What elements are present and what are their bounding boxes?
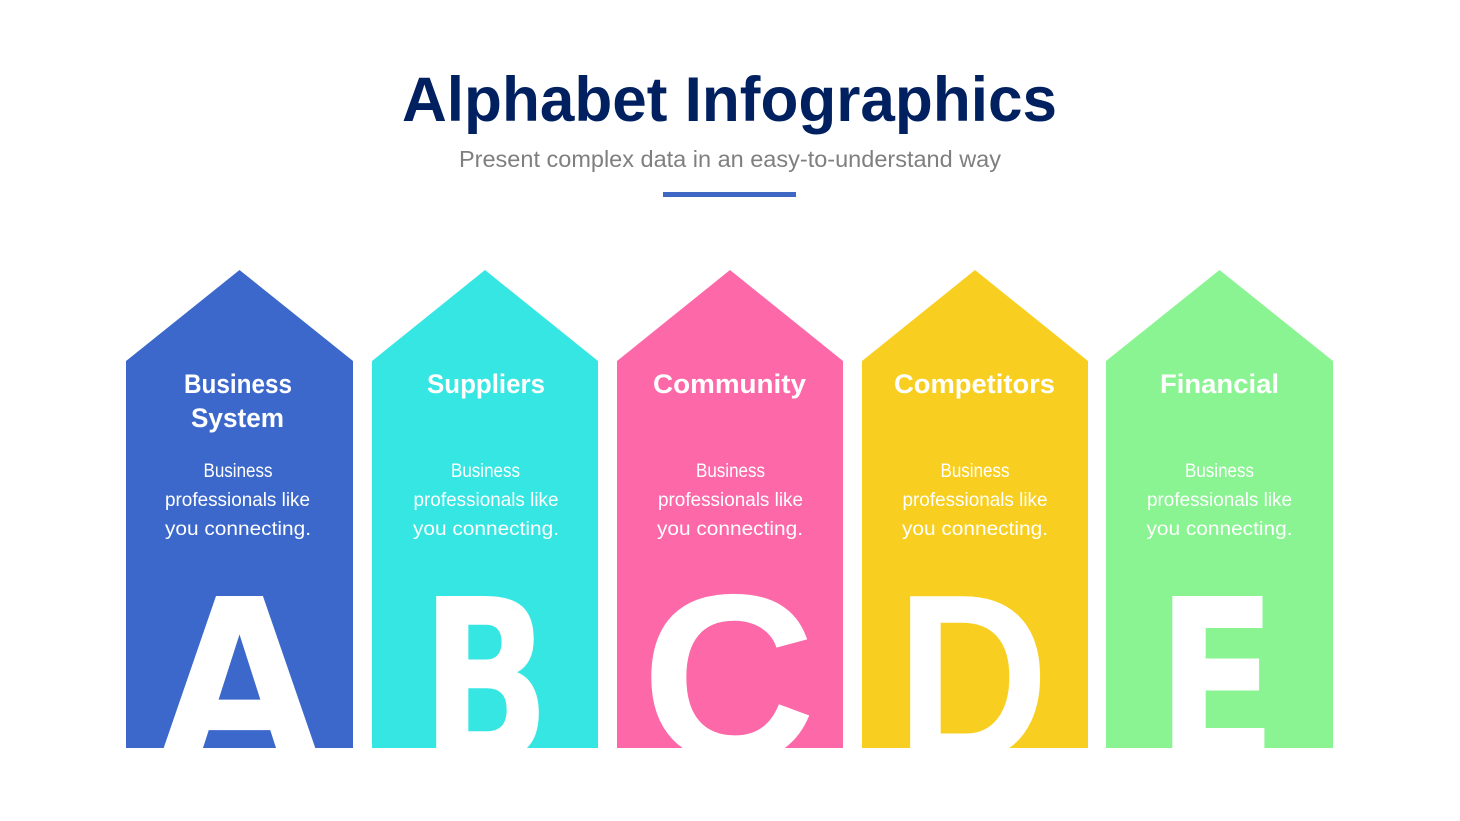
- heading C: Community: [653, 369, 806, 399]
- body text A: Business: [204, 460, 273, 482]
- heading A: Business: [184, 369, 292, 399]
- panel: C Community: [617, 270, 843, 748]
- arrow shape B: [372, 270, 598, 748]
- body text D: you connecting.: [902, 518, 1048, 540]
- letter C: C: [641, 545, 816, 811]
- arrow shape E: [1106, 270, 1333, 748]
- panel: D Competitors: [862, 270, 1088, 748]
- heading E: Financial: [1160, 369, 1279, 399]
- heading A: System: [191, 403, 284, 433]
- panel: E Financial: [1106, 270, 1333, 748]
- arrow shape A: [126, 270, 353, 748]
- letter B: B: [420, 553, 551, 814]
- body text C: professionals like: [658, 489, 803, 511]
- body text E: professionals like: [1147, 489, 1292, 511]
- arrow shape C: [617, 270, 843, 748]
- body text C: [657, 460, 803, 540]
- arrow shape D: [862, 270, 1088, 748]
- body text D: [902, 460, 1048, 540]
- panel: B Suppliers: [372, 270, 598, 748]
- body text D: professionals like: [902, 489, 1048, 511]
- body text C: you connecting.: [657, 518, 803, 540]
- body text A: you connecting.: [165, 518, 311, 540]
- body text B: Business: [451, 460, 520, 482]
- letter D: D: [896, 544, 1049, 811]
- body text A: [165, 460, 311, 540]
- heading A: [184, 369, 292, 433]
- body text D: Business: [940, 460, 1010, 482]
- title underline: [663, 192, 796, 197]
- body text C: Business: [696, 460, 765, 482]
- heading B: Suppliers: [427, 369, 545, 399]
- panel: A Business System: [126, 270, 353, 748]
- title: Alphabet Infographics: [402, 65, 1057, 135]
- heading D: Competitors: [894, 369, 1055, 399]
- body text E: Business: [1185, 460, 1254, 482]
- body text E: you connecting.: [1146, 518, 1292, 540]
- subtitle: Present complex data in an easy-to-understand way: [459, 146, 1002, 172]
- body text B: you connecting.: [413, 518, 559, 540]
- body text B: [413, 460, 559, 540]
- body text B: professionals like: [414, 489, 558, 511]
- letter A: A: [158, 552, 320, 814]
- letter E: E: [1156, 551, 1277, 813]
- body text A: professionals like: [165, 489, 310, 511]
- body text E: [1146, 460, 1292, 540]
